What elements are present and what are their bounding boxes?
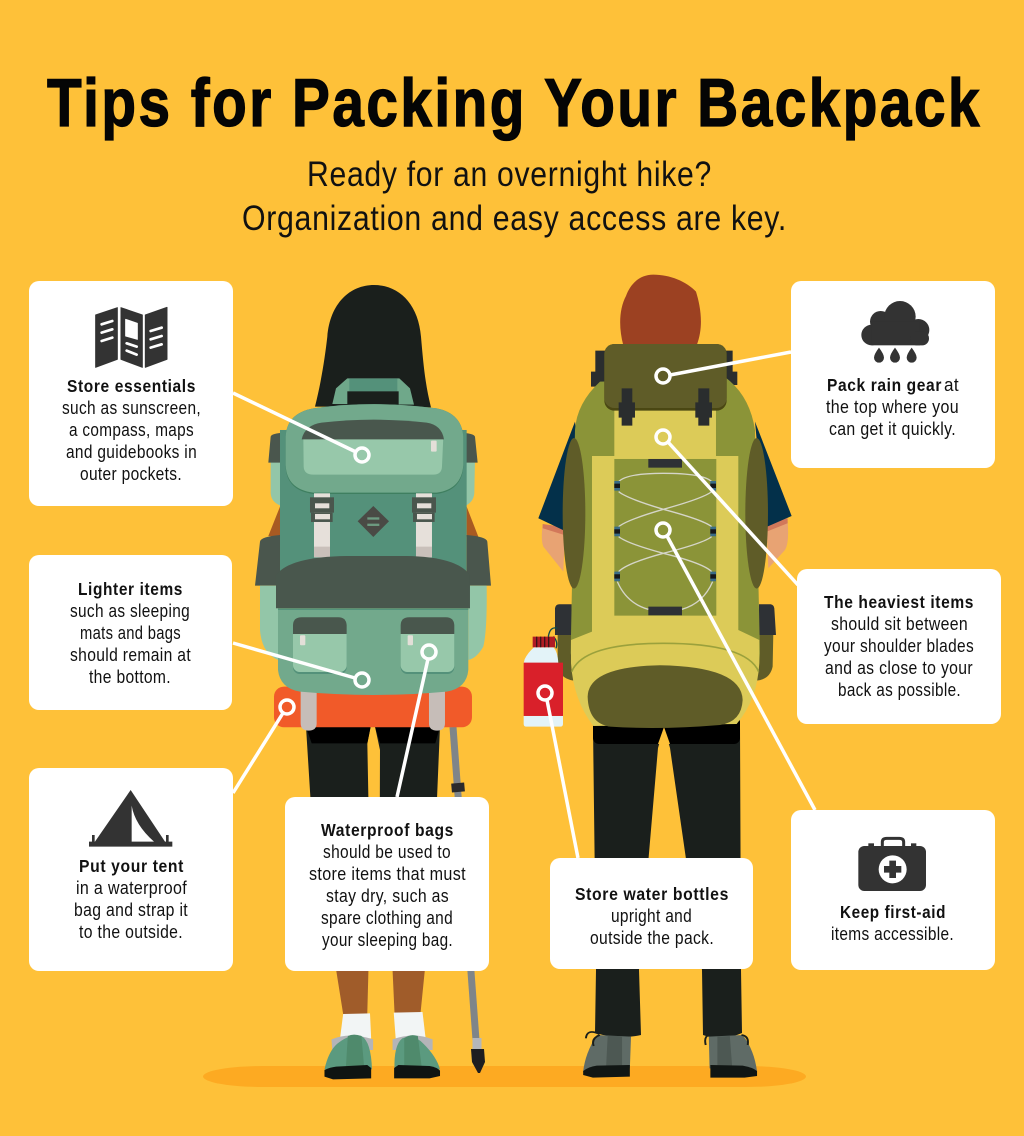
text: your shoulder blades: [824, 635, 974, 656]
shoulders: [268, 507, 478, 537]
lid: [286, 404, 463, 494]
olive hip pockets: [558, 633, 773, 681]
icon: rain cloud: [861, 301, 929, 363]
text: the top where you: [826, 396, 959, 417]
text: items accessible.: [831, 923, 954, 944]
lower side pockets: [260, 586, 487, 660]
connector: first aid: [656, 523, 815, 810]
text: the bottom.: [89, 666, 171, 687]
text: stay dry, such as: [326, 885, 449, 906]
text: such as sleeping: [70, 600, 190, 621]
hair: [315, 285, 431, 407]
panel: store essentials: [29, 281, 233, 506]
diamond logo: [358, 506, 389, 537]
lower side straps: [255, 535, 491, 586]
trekking pole: [451, 727, 485, 1073]
arms: [542, 522, 788, 572]
main pack: [571, 378, 760, 703]
panel: heaviest items: [797, 569, 1001, 724]
text: mats and bags: [80, 622, 181, 643]
text: outer pockets.: [80, 463, 182, 484]
text: back as possible.: [838, 679, 961, 700]
lower right pocket: [401, 617, 454, 674]
text: such as sunscreen,: [62, 397, 201, 418]
connector: lighter items: [233, 643, 369, 687]
hip straps: [555, 604, 776, 635]
panel: water bottles: [550, 858, 753, 969]
bottom pocket: [588, 665, 743, 728]
text: [309, 841, 466, 950]
heading: Lighter items: [78, 579, 183, 599]
panel: lighter items: [29, 555, 232, 710]
icon: tent: [89, 790, 172, 847]
connector: heaviest items: [656, 430, 798, 585]
straps and buckles: [310, 493, 436, 557]
subtitle: [242, 155, 787, 238]
water bottle: [524, 628, 563, 727]
connector: essentials: [233, 393, 369, 462]
text: spare clothing and: [321, 907, 453, 928]
text: bag and strap it: [74, 899, 188, 920]
text: can get it quickly.: [829, 418, 956, 439]
text: should be used to: [323, 841, 451, 862]
lower left pocket: [293, 617, 347, 674]
connector lines and markers: [233, 352, 815, 858]
man legs and trousers: [593, 716, 742, 1038]
top handle: [332, 378, 414, 405]
woman feet: [324, 970, 440, 1079]
lid pocket: [302, 420, 444, 475]
ground shadow: [203, 1066, 806, 1087]
upper side straps: [268, 433, 478, 463]
text: in a waterproof: [76, 877, 187, 898]
woman hiker legs and leggings: [306, 727, 440, 968]
mat straps: [301, 688, 445, 731]
connector: waterproof bags: [397, 645, 436, 797]
heading: Waterproof bags: [321, 820, 454, 840]
text: to the outside.: [79, 921, 183, 942]
text: store items that must: [309, 863, 466, 884]
icon: map: [96, 307, 167, 367]
text: a compass, maps: [69, 419, 194, 440]
text: upright and: [611, 905, 692, 926]
text: [74, 877, 188, 942]
side pockets: [563, 438, 585, 589]
pack back straps: [591, 351, 737, 387]
text: and as close to your: [825, 657, 973, 678]
yellow panel: [571, 410, 759, 726]
centre mesh panel: [614, 459, 716, 616]
hair: [620, 275, 701, 345]
bungee cords: [614, 473, 716, 609]
dark band: [276, 556, 470, 608]
upper side pockets: [271, 460, 475, 507]
text: at: [944, 374, 959, 395]
orange sleeping mat: [274, 687, 472, 727]
text: and guidebooks in: [66, 441, 197, 462]
main body: [280, 430, 467, 577]
text: outside the pack.: [590, 927, 714, 948]
heading: Keep first-aid: [840, 902, 946, 922]
woman hiker with green backpack: [255, 285, 491, 731]
text: [70, 600, 191, 687]
connector: rain gear: [656, 352, 791, 383]
text: [590, 905, 714, 948]
heading: The heaviest items: [824, 592, 974, 612]
lid straps: [619, 388, 712, 426]
shirt sleeves: [538, 422, 792, 531]
lower compartment: [278, 608, 468, 695]
panel: first aid: [791, 810, 995, 970]
icon: first-aid kit: [858, 838, 926, 891]
heading: Put your tent: [79, 856, 184, 876]
subtitle: Ready for an overnight hike?: [307, 155, 712, 194]
man hiker with olive backpack: [524, 275, 792, 728]
connector: water bottle: [538, 686, 578, 858]
text: [826, 374, 959, 439]
text: your sleeping bag.: [322, 929, 453, 950]
panel: waterproof bags: [285, 797, 489, 971]
heading: Store water bottles: [575, 884, 729, 904]
panel: tent: [29, 768, 233, 971]
bottom seam: [572, 643, 759, 672]
text: [62, 397, 201, 484]
heading: Store essentials: [67, 376, 196, 396]
subtitle: Organization and easy access are key.: [242, 199, 787, 238]
connector: tent: [233, 700, 294, 793]
top lid: [604, 344, 727, 411]
text: should remain at: [70, 644, 191, 665]
man boots: [583, 1032, 757, 1078]
text: should sit between: [831, 613, 968, 634]
text: [824, 613, 974, 700]
text: Pack rain gear: [827, 375, 942, 395]
panel: rain gear: [791, 281, 995, 468]
